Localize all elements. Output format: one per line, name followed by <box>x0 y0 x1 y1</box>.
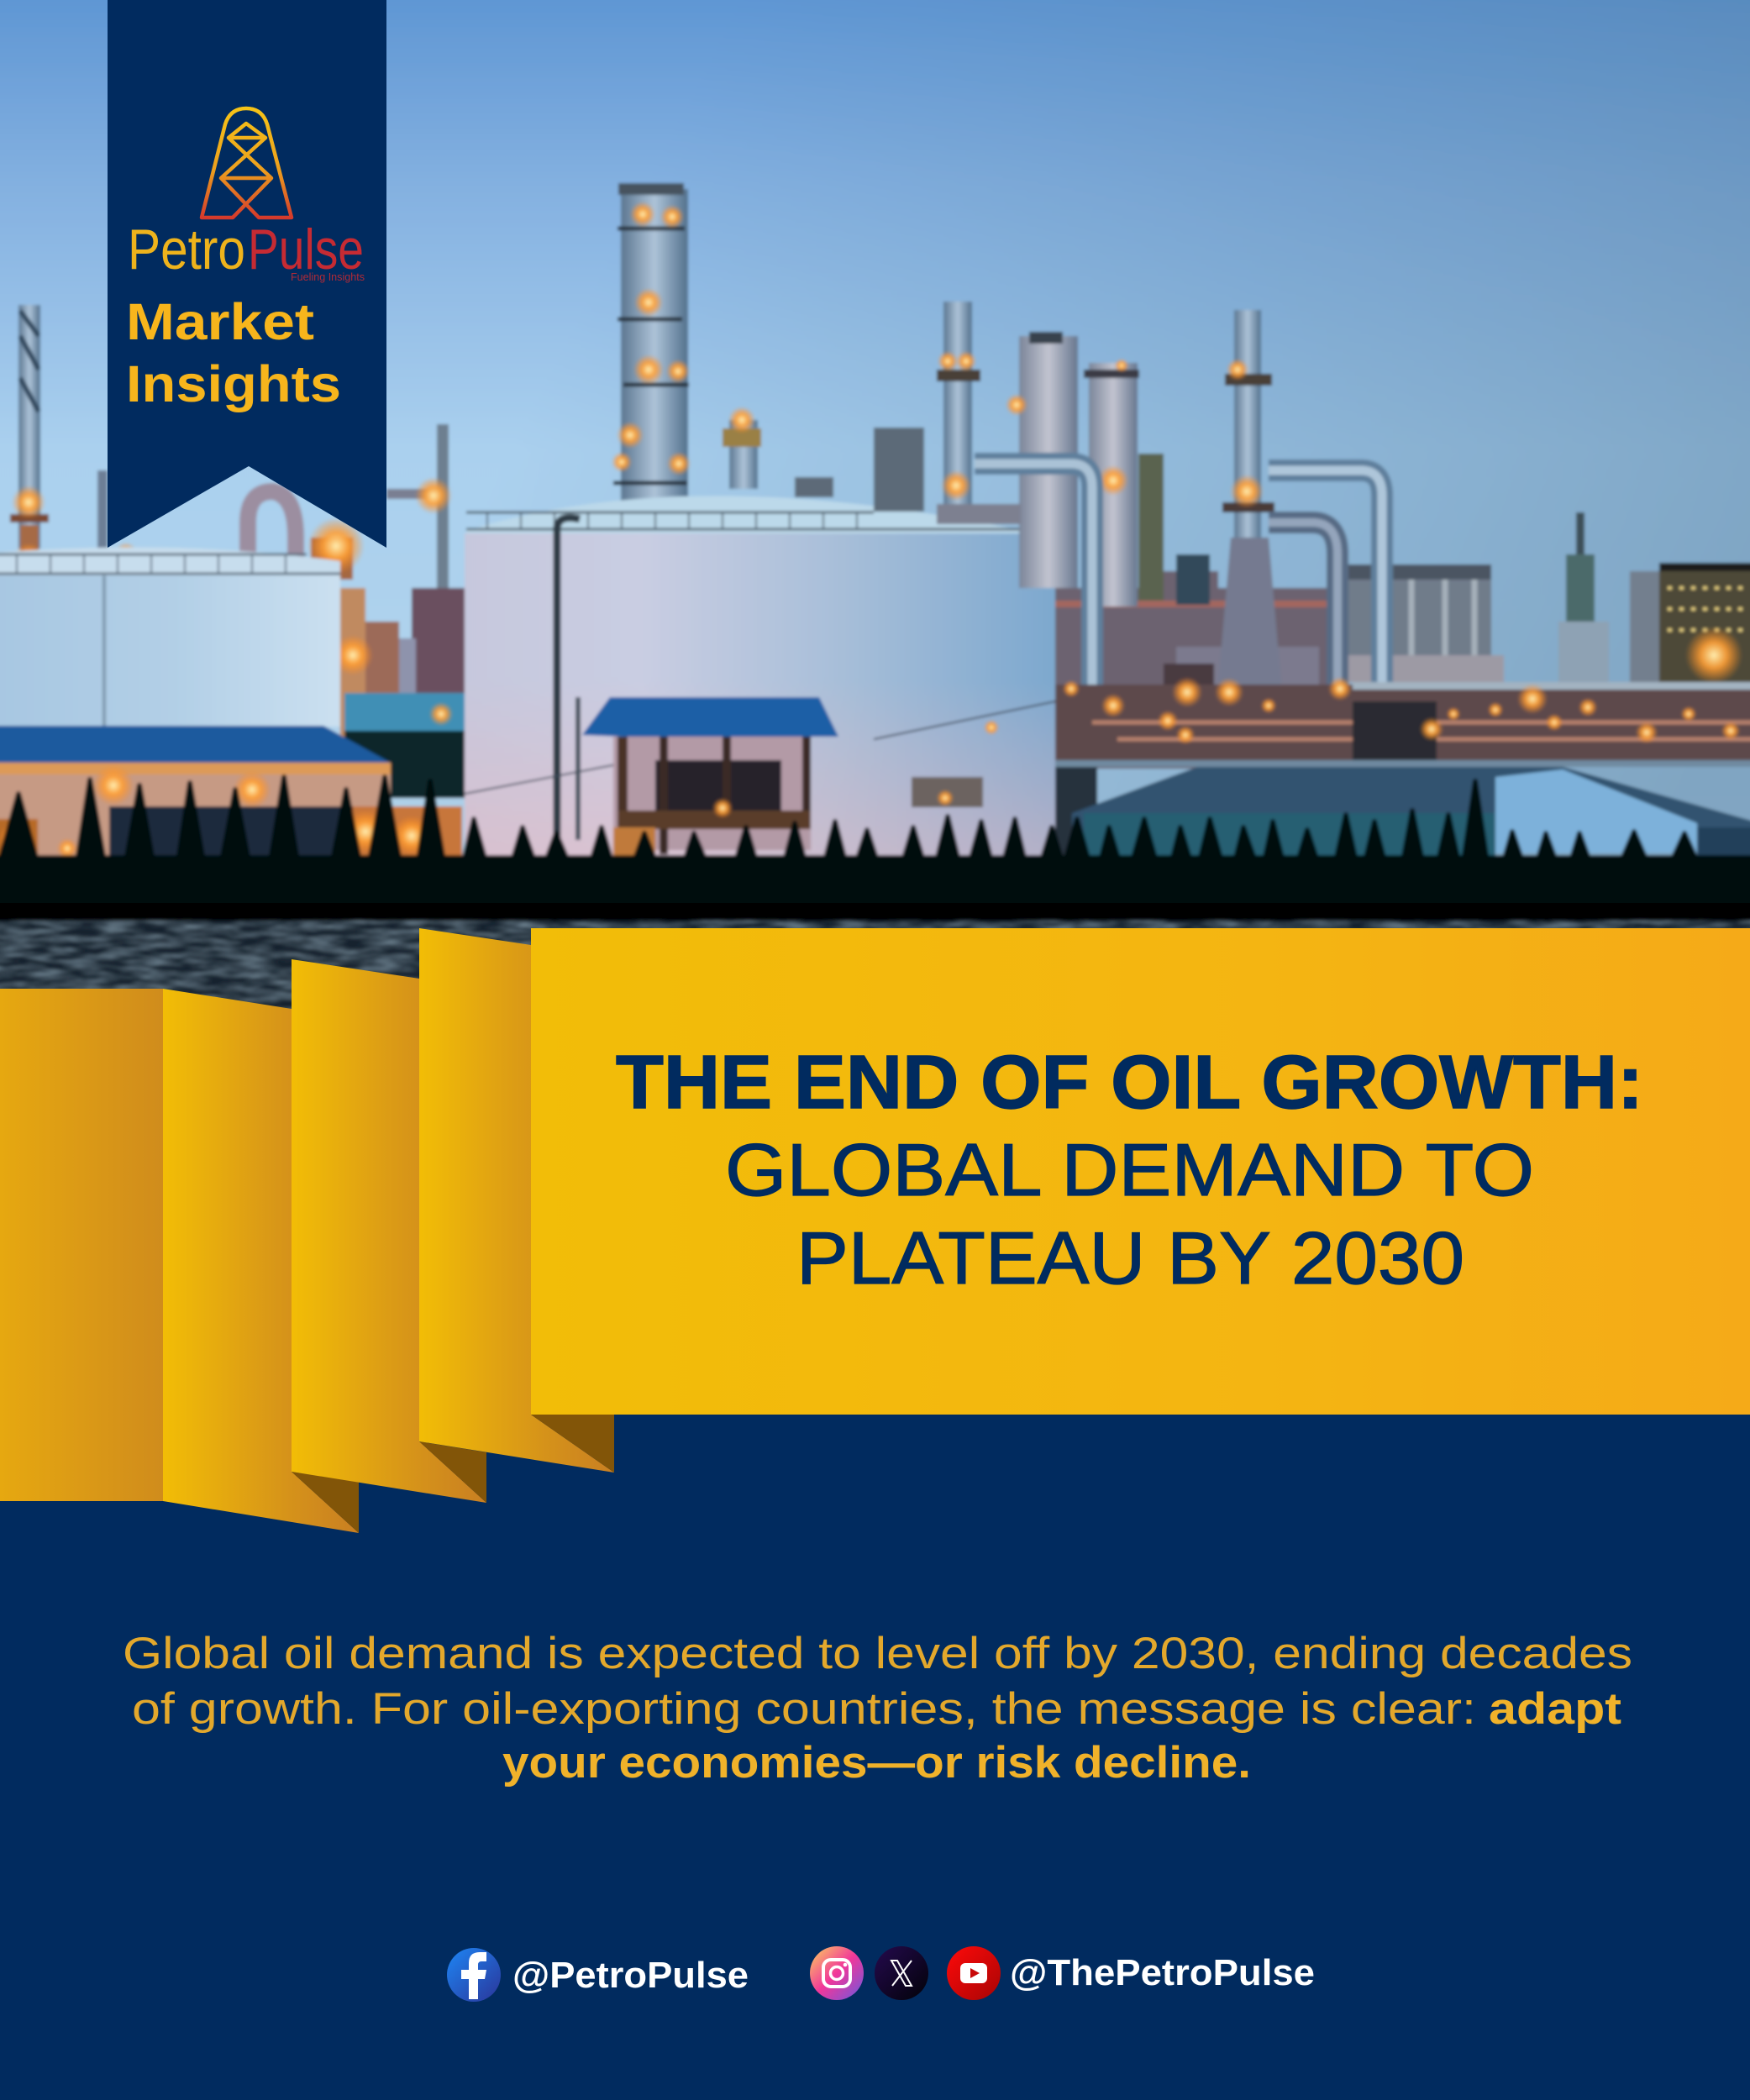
icon: PetroPulse derrick logo <box>202 108 292 218</box>
banner label: Market Insights: Insights <box>126 355 341 412</box>
social handles <box>447 1946 1315 2002</box>
gap structure between tanks <box>333 588 466 798</box>
curved steam pipes <box>975 464 1382 719</box>
summary paragraph: your economies—or risk decline. <box>502 1738 1251 1788</box>
title: GLOBAL DEMAND TO <box>725 1128 1534 1211</box>
water foreground <box>0 921 1750 1021</box>
plant piping and lights <box>984 677 1750 764</box>
logo wordmark: Pulse <box>248 218 364 281</box>
title: PLATEAU BY 2030 <box>796 1216 1464 1299</box>
tall refinery tower <box>612 183 691 508</box>
title <box>616 1041 1643 1299</box>
Facebook handle: @PetroPulse <box>512 1955 749 1996</box>
tree line <box>0 777 1697 861</box>
distant tower and building <box>1558 512 1750 687</box>
left storage tank <box>0 548 340 727</box>
shelter with blue roof <box>582 697 838 857</box>
pipes behind banner <box>97 424 452 592</box>
ribbon fold 2 <box>163 989 359 1533</box>
silos <box>1344 564 1504 682</box>
navy lower panel <box>0 1176 1750 2100</box>
photo: oil refinery at dusk <box>0 0 1750 1021</box>
title: THE END OF OIL GROWTH: <box>616 1041 1643 1125</box>
short stack <box>723 407 761 489</box>
ribbon fold 4 <box>419 928 614 1473</box>
icon: Instagram <box>810 1946 864 2000</box>
banner shape <box>108 0 386 548</box>
ribbon main panel <box>531 928 1750 1415</box>
summary paragraph: adapt <box>1489 1684 1621 1734</box>
summary paragraph: Global oil demand is expected to level off by 2030, ending decades <box>123 1629 1632 1678</box>
summary paragraph <box>123 1629 1632 1788</box>
banner label: Market Insights <box>126 293 341 412</box>
banner label: Market Insights: Market <box>126 293 314 350</box>
ribbon fold 3 <box>292 959 486 1503</box>
YouTube / Instagram / X handle: @ThePetroPulse <box>1010 1952 1315 1993</box>
banner with logo <box>108 0 386 548</box>
folded ribbon <box>0 928 1750 1533</box>
logo wordmark <box>128 218 365 283</box>
central storage tank <box>465 496 1055 857</box>
logo wordmark: Petro <box>128 218 245 281</box>
refinery process block <box>1055 554 1344 769</box>
far-left spiral stack <box>10 305 49 574</box>
refinery columns <box>874 302 1164 606</box>
left blue roof and lit building <box>0 726 462 858</box>
sky <box>0 0 1750 924</box>
icon: YouTube <box>947 1946 1001 2000</box>
refinery stack with pipes <box>1218 310 1281 685</box>
icon: Facebook <box>447 1948 501 2002</box>
dark hedge band <box>0 855 1750 921</box>
low warehouse roof <box>912 760 1750 859</box>
small vent on dome <box>795 477 833 497</box>
icon: X <box>875 1946 928 2000</box>
logo wordmark: Fueling Insights <box>291 270 365 283</box>
summary paragraph: of growth. For oil-exporting countries, the message is clear: <box>132 1684 1476 1734</box>
ribbon fold 1 <box>0 989 163 1501</box>
